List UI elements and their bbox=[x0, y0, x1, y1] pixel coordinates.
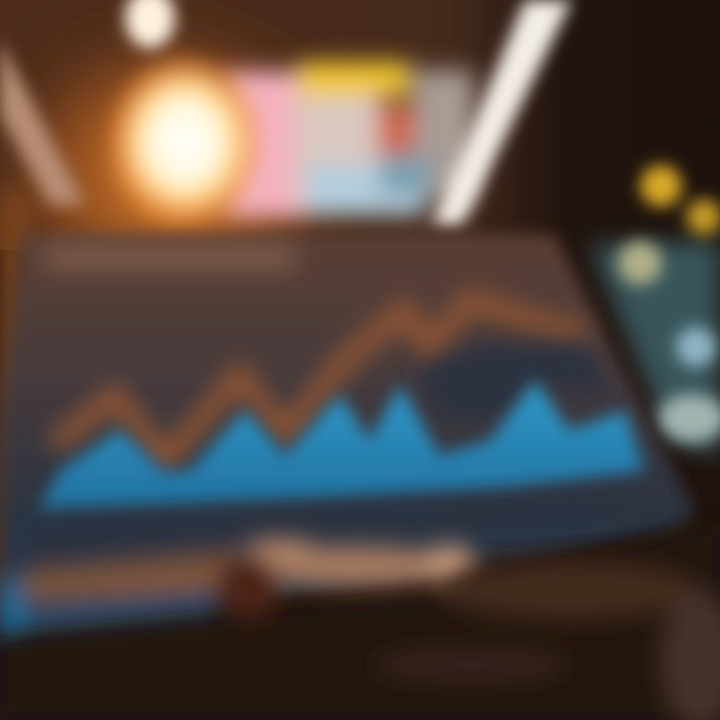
icon: yellow dots bbox=[640, 165, 720, 235]
hand: peach highlight bbox=[220, 538, 476, 620]
hand: lower right shadow forms bbox=[370, 560, 720, 720]
light: top spot bbox=[125, 0, 175, 48]
tablet heading glow bbox=[45, 245, 295, 270]
orange glow bbox=[0, 5, 360, 345]
panel: lower dark foreground bbox=[0, 520, 720, 720]
chart: orange line bbox=[55, 300, 585, 462]
panel: right teal background bbox=[590, 240, 720, 455]
chart: lower grid bands bbox=[0, 490, 665, 640]
chart: dark band above blue area bbox=[415, 345, 610, 420]
chart: blue area bbox=[38, 380, 645, 510]
icon: pale bokeh dots bbox=[618, 241, 720, 442]
panel: colorful background screen bbox=[225, 62, 474, 217]
light: central sun flare bbox=[103, 50, 267, 234]
panel: tablet bbox=[0, 235, 695, 640]
light: right diagonal strip bbox=[432, 0, 572, 225]
light: left diagonal strip bbox=[0, 40, 85, 205]
